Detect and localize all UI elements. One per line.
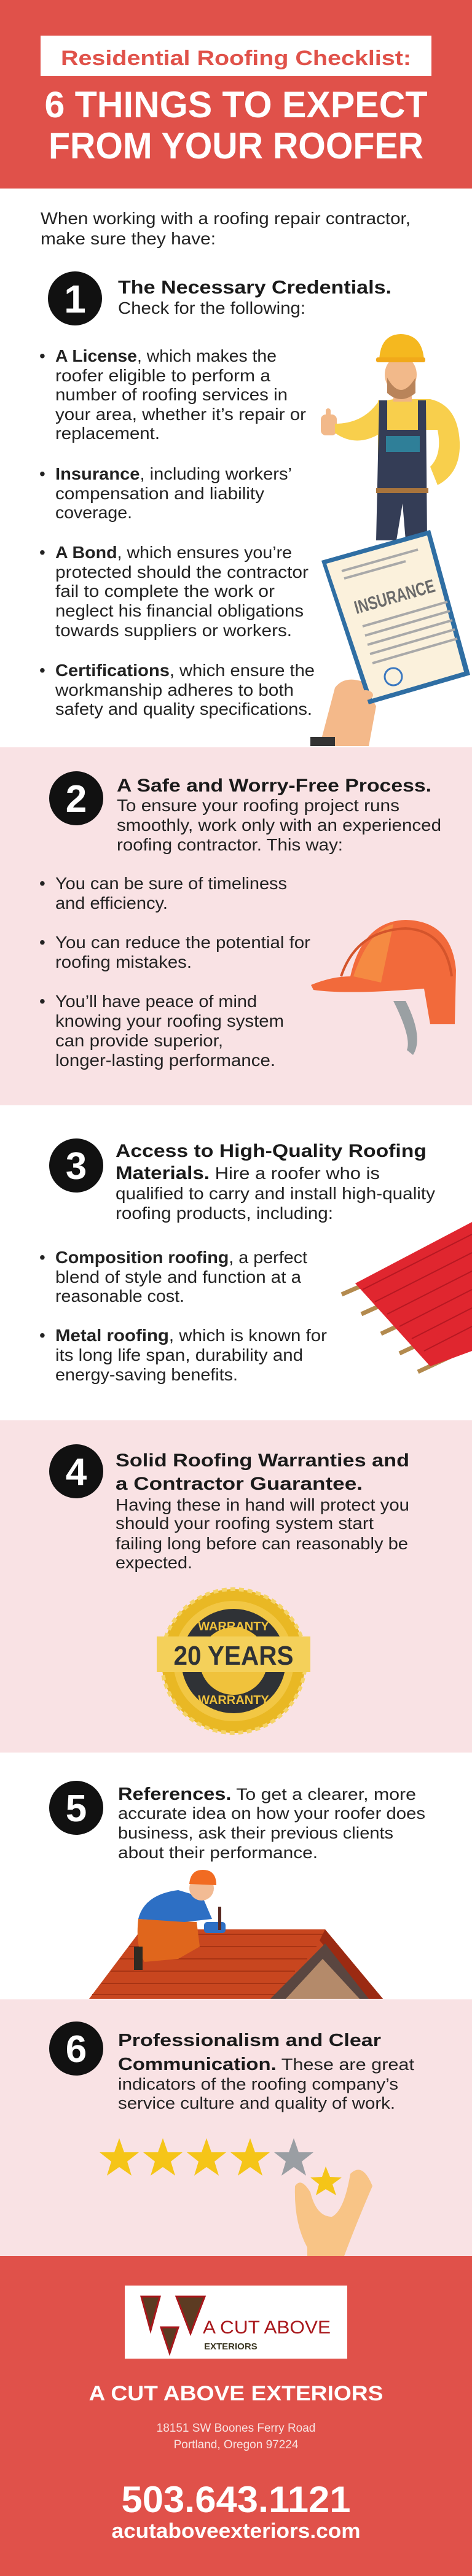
bullet list 2: roofing mistakes.	[55, 952, 192, 971]
bullet list 1: neglect his financial obligations	[55, 601, 304, 620]
heading 6: indicators of the roofing company’s	[118, 2075, 398, 2093]
heading 1: Check for the following:	[118, 298, 305, 317]
bullet list 2	[39, 874, 310, 1070]
heading 6: Communication. These are great	[118, 2055, 415, 2074]
number badge 6	[49, 2021, 103, 2076]
company name: A CUT ABOVE EXTERIORS	[88, 2382, 384, 2405]
heading 3	[116, 1141, 435, 1223]
number badge 1: 1	[64, 277, 86, 321]
bullet list 1: protected should the contractor	[55, 562, 309, 582]
number badge 4: 4	[66, 1451, 87, 1493]
main title: FROM YOUR ROOFER	[49, 125, 423, 166]
bullet list 3: energy-saving benefits.	[55, 1365, 238, 1384]
heading 6: service culture and quality of work.	[118, 2094, 395, 2112]
heading 3: qualified to carry and install high-quality	[116, 1184, 435, 1203]
bullet list 3: Metal roofing , which is known for	[55, 1326, 327, 1345]
bullet list 2: •	[39, 874, 45, 893]
bullet list 2: knowing your roofing system	[55, 1011, 284, 1030]
bullet list 2: longer-lasting performance.	[55, 1051, 275, 1070]
bullet list 2: You’ll have peace of mind	[55, 992, 257, 1011]
bullet list 1: your area, whether it’s repair or	[55, 405, 306, 424]
main title: 6 THINGS TO EXPECT	[44, 84, 428, 125]
number badge 4	[49, 1444, 103, 1498]
illustration: metal roofing sheet	[342, 1222, 472, 1372]
number badge 5	[49, 1781, 103, 1835]
bullet list 1: workmanship adheres to both	[55, 680, 294, 699]
section 1: credentials	[39, 271, 470, 746]
bullet list 1: towards suppliers or workers.	[55, 621, 292, 640]
heading 4	[116, 1450, 409, 1572]
bullet list 1	[39, 346, 315, 718]
bullet list 2: You can be sure of timeliness	[55, 874, 287, 893]
bullet list 1: •	[39, 543, 45, 562]
heading 6: Professionalism and Clear	[118, 2031, 381, 2050]
intro text	[41, 209, 411, 248]
bullet list 3: reasonable cost.	[55, 1286, 184, 1306]
bullet list 1: number of roofing services in	[55, 385, 288, 404]
heading 2: A Safe and Worry-Free Process.	[117, 776, 431, 796]
illustration: insurance certificate	[310, 530, 470, 746]
intro text: When working with a roofing repair contractor,	[41, 209, 411, 228]
heading 3: Materials. Hire a roofer who is	[116, 1163, 380, 1183]
heading 3: Access to High-Quality Roofing	[116, 1141, 427, 1161]
intro text: make sure they have:	[41, 229, 216, 248]
heading 2: smoothly, work only with an experienced	[117, 815, 441, 835]
bullet list 3: •	[39, 1326, 45, 1345]
bullet list 1: A Bond, which ensures you’re	[55, 543, 292, 562]
heading 4: Solid Roofing Warranties and	[116, 1450, 409, 1471]
bullet list 1: compensation and liability	[55, 484, 264, 503]
bullet list 2: and efficiency.	[55, 893, 168, 912]
illustration: worker	[321, 334, 460, 540]
heading 1	[118, 276, 391, 317]
illustration: rating stars and hand	[100, 2138, 372, 2256]
number badge 1	[48, 271, 102, 325]
bullet list 1: fail to complete the work or	[55, 582, 275, 601]
bullet list 1: Insurance, including workers’	[55, 464, 292, 483]
header banner	[0, 0, 472, 189]
bullet list 1: •	[39, 464, 45, 483]
bullet list 2: •	[39, 933, 45, 952]
heading 3: roofing products, including:	[116, 1204, 333, 1223]
heading 2: To ensure your roofing project runs	[117, 796, 399, 815]
illustration: 20 years warranty badge: WARRANTY	[198, 1694, 269, 1707]
bullet list 1: •	[39, 346, 45, 365]
section 5: references	[49, 1781, 425, 1999]
heading 5	[118, 1784, 425, 1862]
bullet list 3: its long life span, durability and	[55, 1345, 303, 1364]
bullet list 1: •	[39, 661, 45, 680]
bullet list 3	[39, 1248, 327, 1384]
number badge 6: 6	[66, 2028, 87, 2071]
address	[157, 2422, 315, 2451]
bullet list 2: You can reduce the potential for	[55, 933, 310, 952]
heading 5: accurate idea on how your roofer does	[118, 1804, 425, 1823]
main title	[44, 84, 428, 166]
illustration: 20 years warranty badge: WARRANTY	[198, 1620, 269, 1633]
section 3: materials	[39, 1138, 472, 1384]
heading 4: should your roofing system start	[116, 1514, 374, 1533]
illustration: 20 years warranty badge	[157, 1589, 310, 1733]
number badge 3	[49, 1138, 103, 1193]
bullet list 1: replacement.	[55, 424, 160, 443]
logo box	[125, 2286, 347, 2359]
bullet list 1: roofer eligible to perform a	[55, 366, 270, 385]
number badge 2: 2	[66, 778, 87, 820]
illustration: insurance certificate: INSURANCE	[352, 576, 438, 618]
heading 2	[117, 776, 441, 854]
heading 4: expected.	[116, 1553, 192, 1572]
address: 18151 SW Boones Ferry Road	[157, 2422, 315, 2435]
heading 4: a Contractor Guarantee.	[116, 1474, 363, 1494]
illustration: 20 years warranty badge: 20 YEARS	[173, 1641, 294, 1671]
heading 5: about their performance.	[118, 1843, 318, 1862]
address: Portland, Oregon 97224	[174, 2438, 299, 2451]
subtitle box	[41, 36, 431, 76]
bullet list 1: safety and quality specifications.	[55, 699, 312, 718]
section 2: safe process	[39, 771, 456, 1070]
bullet list 2: can provide superior,	[55, 1031, 223, 1050]
number badge 2	[49, 771, 103, 825]
bullet list 1: coverage.	[55, 503, 132, 522]
logo box: A CUT ABOVE	[203, 2317, 331, 2338]
phone: 503.643.1121	[122, 2479, 350, 2520]
bullet list 1: Certifications, which ensure the	[55, 661, 315, 680]
subtitle box: Residential Roofing Checklist:	[61, 47, 411, 70]
heading 6	[118, 2031, 415, 2112]
bullet list 1: A License, which makes the	[55, 346, 277, 365]
bullet list 3: blend of style and function at a	[55, 1267, 301, 1286]
heading 5: business, ask their previous clients	[118, 1824, 393, 1842]
number badge 5: 5	[66, 1788, 87, 1830]
heading 4: failing long before can reasonably be	[116, 1534, 408, 1553]
footer	[0, 2256, 472, 2576]
heading 1: The Necessary Credentials.	[118, 276, 391, 298]
section 4: warranties	[49, 1444, 409, 1733]
heading 5: References. To get a clearer, more	[118, 1784, 416, 1804]
number badge 3: 3	[66, 1145, 87, 1188]
website: acutaboveexteriors.com	[112, 2520, 360, 2543]
logo box: EXTERIORS	[204, 2341, 258, 2352]
illustration: roofer on roof	[89, 1870, 383, 1999]
bullet list 3: •	[39, 1248, 45, 1267]
bullet list 3: Composition roofing , a perfect	[55, 1248, 307, 1267]
illustration: orange hard hat	[311, 920, 456, 1055]
heading 4: Having these in hand will protect you	[116, 1495, 409, 1514]
heading 2: roofing contractor. This way:	[117, 835, 343, 854]
bullet list 2: •	[39, 992, 45, 1011]
section 6: professionalism	[49, 2021, 415, 2256]
